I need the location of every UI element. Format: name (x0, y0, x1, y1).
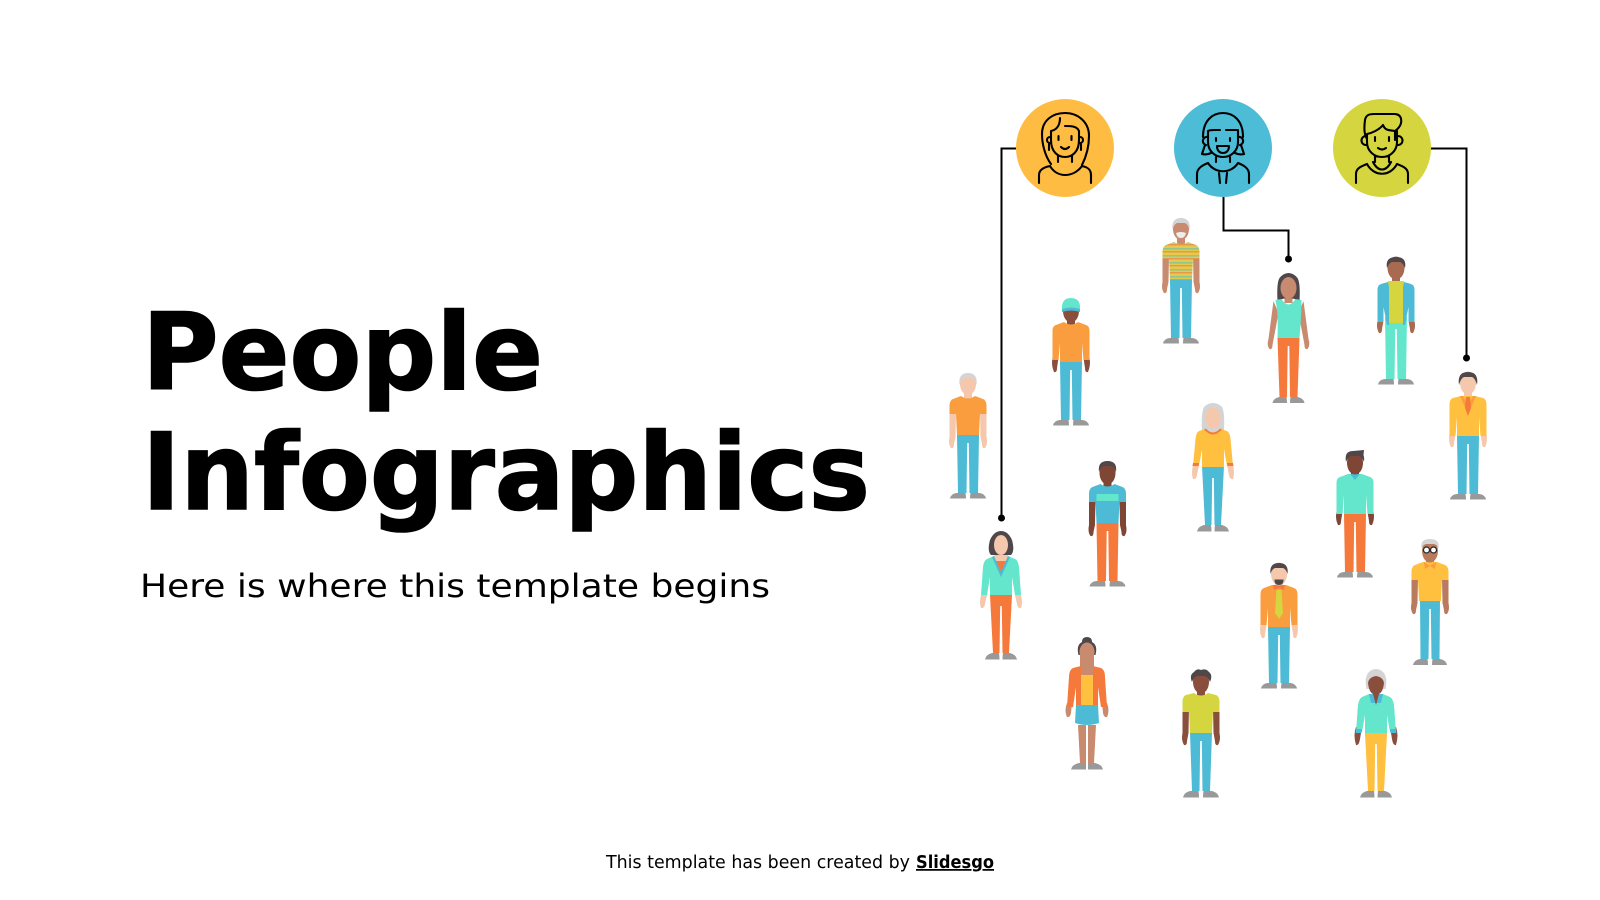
person: grey-haired man in orange t-shirt (949, 373, 987, 498)
person: old man with glasses in yellow shirt (1411, 539, 1449, 665)
avatar: woman on orange circle (1016, 99, 1114, 197)
title: People (142, 291, 543, 414)
title: Infographics (142, 411, 870, 534)
person: man in teal sweater and orange trousers (1336, 450, 1374, 578)
avatar: girl on blue circle (1174, 99, 1272, 197)
subtitle: Here is where this template begins (140, 567, 770, 605)
person: woman in teal jacket and orange trousers (980, 531, 1022, 660)
person: man with teal cap (1052, 298, 1090, 426)
person: grey-haired woman in teal sweater and yellow trousers (1354, 669, 1398, 798)
title (142, 291, 870, 534)
person: man in blue t-shirt and orange trousers (1088, 461, 1126, 586)
person: man in blue jacket (1377, 256, 1415, 384)
person: old man in striped shirt (1162, 218, 1200, 344)
person: grey-haired woman in yellow sweater (1192, 403, 1234, 532)
person: man in yellow jacket with orange tie (1449, 372, 1487, 500)
avatar: man on lime circle (1333, 99, 1431, 197)
person: woman in teal tank top (1268, 273, 1309, 403)
person: woman in orange jacket and blue skirt (1066, 637, 1108, 770)
footer credit: This template has been created by (605, 853, 910, 873)
connector: middle avatar to woman (1224, 197, 1292, 262)
person: bearded man in orange shirt with lime tie (1260, 562, 1298, 688)
connector: right avatar to man (1431, 148, 1470, 362)
person: man in lime t-shirt (1182, 669, 1220, 798)
connector: left avatar to woman (998, 148, 1016, 522)
footer credit: Slidesgo (916, 853, 994, 873)
